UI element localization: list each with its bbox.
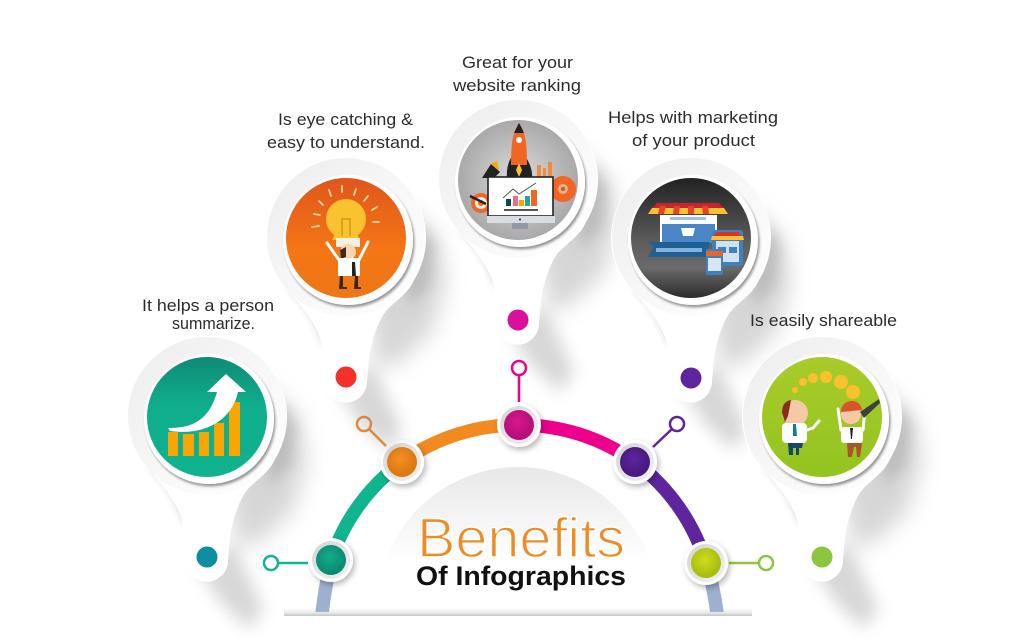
label: eye catching: Is eye catching &	[278, 111, 413, 129]
pin body	[438, 100, 598, 345]
pin shadow	[286, 203, 446, 450]
label: website ranking: Great for your	[462, 54, 574, 72]
icon: lightbulb man	[312, 186, 379, 289]
label: shareable: Is easily shareable	[750, 312, 897, 330]
icon: online storefront	[648, 203, 744, 275]
arc: orange	[402, 425, 519, 462]
arc: base left	[320, 570, 329, 640]
pin shadow	[631, 203, 791, 450]
arc: magenta	[519, 425, 635, 462]
arc: teal	[331, 462, 402, 560]
panel: summarize pin	[127, 337, 307, 629]
label: marketing: of your product	[632, 132, 755, 150]
label: summarize	[142, 297, 274, 333]
connector: teal	[264, 556, 308, 570]
pin body	[742, 337, 902, 582]
label: website ranking	[452, 54, 581, 95]
dot	[680, 368, 702, 388]
dot	[508, 310, 528, 330]
arc: base right	[705, 581, 724, 612]
dot	[812, 546, 832, 568]
outer ring	[612, 158, 770, 316]
outer ring	[743, 337, 901, 495]
label: website ranking: website ranking	[452, 77, 581, 95]
panel: marketing pin	[611, 158, 791, 450]
disc	[631, 178, 751, 298]
panel: shareable pin	[742, 337, 922, 629]
arc: purple	[635, 462, 706, 563]
connector: green	[729, 556, 773, 570]
icon: two men sharing ideas	[782, 371, 880, 457]
panel: website ranking pin	[438, 100, 618, 392]
pin body	[127, 337, 287, 582]
node: orange	[380, 440, 424, 484]
title: Of Infographics: Of Infographics	[416, 561, 626, 591]
dot	[196, 546, 218, 568]
label: marketing: Helps with marketing	[608, 109, 778, 127]
node: magenta	[497, 403, 541, 447]
arc chart	[320, 425, 720, 640]
inner ring	[759, 354, 889, 484]
panel: eye catching pin	[266, 158, 446, 450]
disc	[286, 178, 406, 298]
pin shadow	[458, 145, 618, 392]
inner ring	[144, 354, 274, 484]
disc	[458, 120, 578, 240]
connector: purple	[653, 417, 684, 447]
dot	[336, 366, 356, 388]
label: eye catching	[267, 111, 425, 152]
outer ring	[439, 100, 597, 258]
inner ring	[283, 175, 413, 305]
label: summarize: It helps a person	[142, 297, 274, 315]
title: Benefits: Benefits	[417, 506, 625, 569]
outer ring	[267, 158, 425, 316]
inner ring	[455, 117, 585, 247]
disc	[147, 357, 267, 477]
label: summarize: summarize.	[172, 315, 255, 333]
node: purple	[613, 440, 657, 484]
icon: rocket and monitor	[470, 123, 576, 229]
pin shadow	[147, 382, 307, 629]
node: teal	[309, 538, 353, 582]
arc base line	[284, 608, 752, 616]
label: marketing	[608, 109, 778, 150]
pin body	[266, 158, 426, 403]
centre dome	[378, 467, 658, 607]
disc	[762, 357, 882, 477]
connector: orange	[357, 417, 386, 446]
inner ring	[628, 175, 758, 305]
title	[416, 506, 626, 591]
label: eye catching: easy to understand.	[267, 134, 425, 152]
pin shadow	[762, 382, 922, 629]
icon: rising bars and arrow	[168, 374, 246, 456]
outer ring	[128, 337, 286, 495]
node: lime	[684, 541, 728, 585]
pin body	[611, 158, 771, 403]
connector: magenta	[512, 361, 526, 402]
